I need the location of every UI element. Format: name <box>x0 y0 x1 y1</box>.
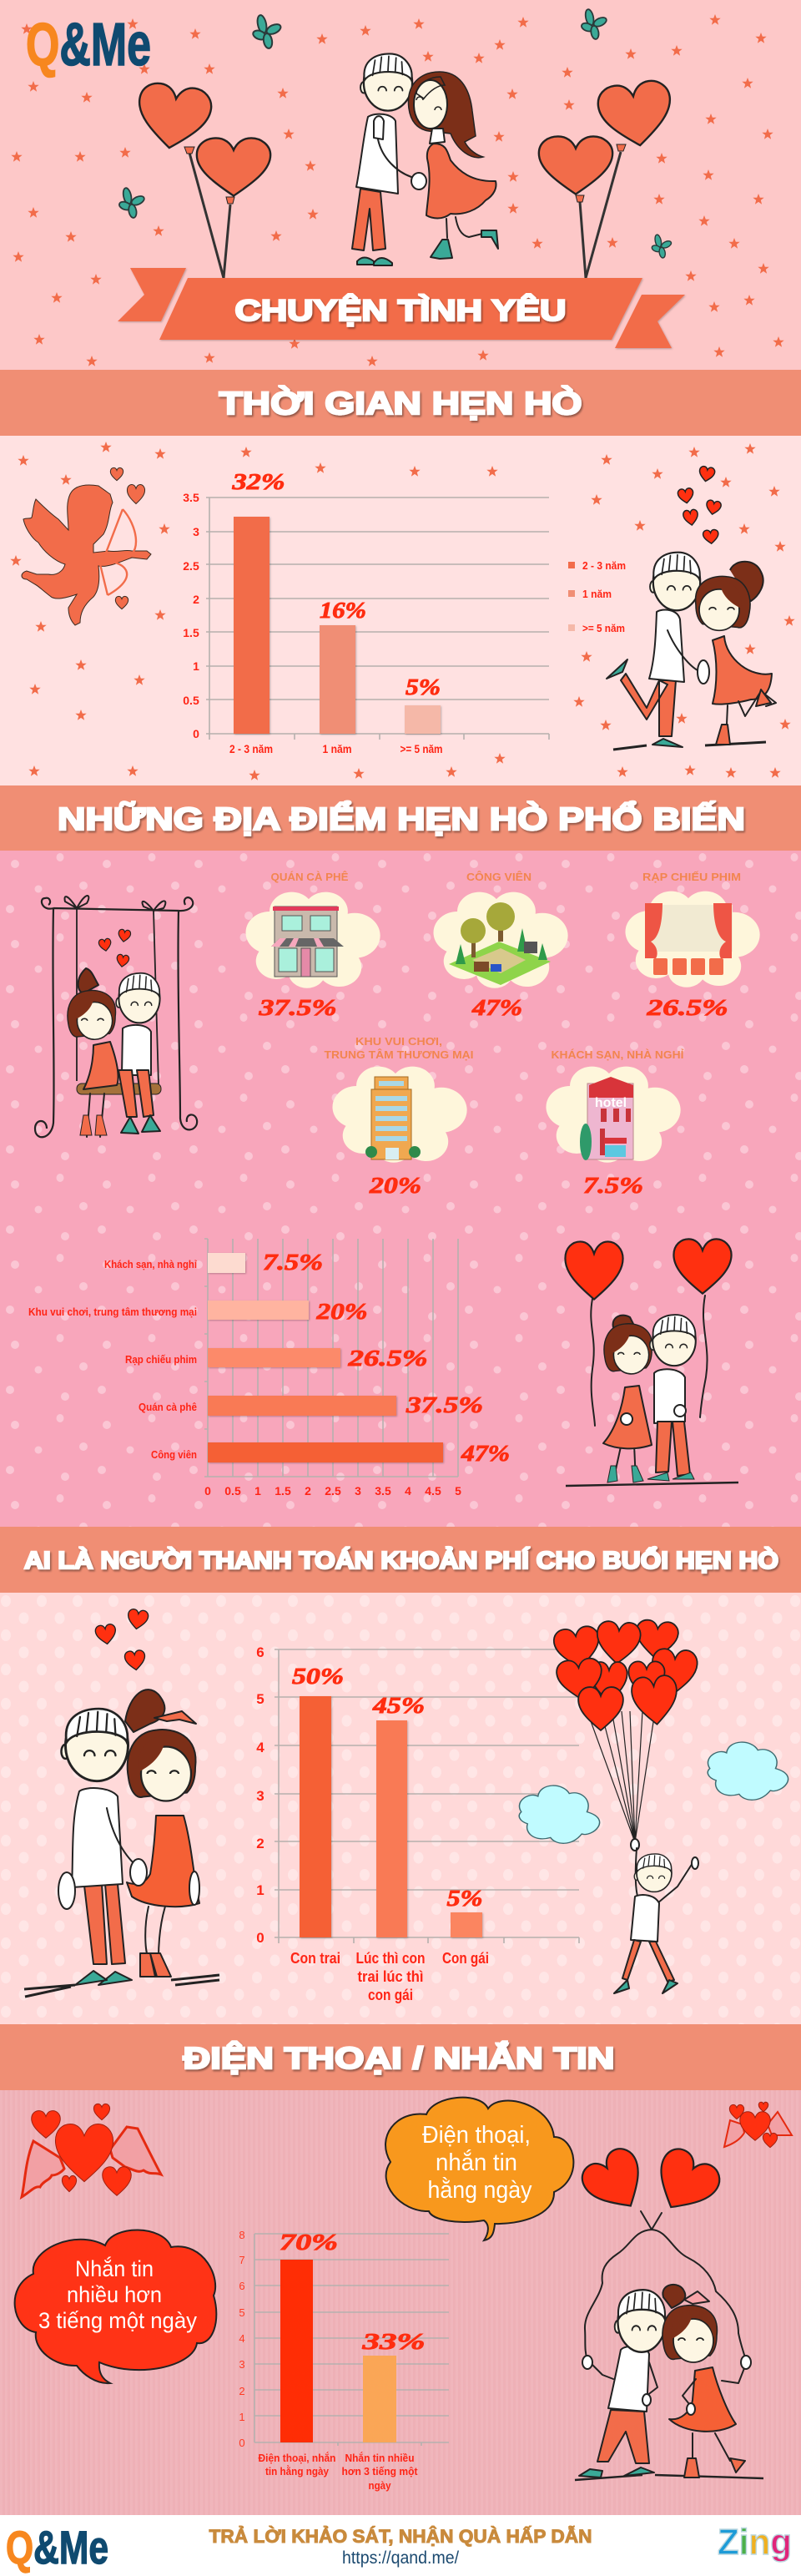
axis values: 2 <box>239 2385 245 2397</box>
illustration: couple with joined balloons <box>575 2143 763 2480</box>
horizontal bar chart: places <box>28 1239 510 1498</box>
icon: coffee shop <box>271 907 344 977</box>
category labels: Công viên <box>151 1448 197 1461</box>
place: công viên: CÔNG VIÊN <box>466 871 531 883</box>
value labels: 5% <box>447 1886 482 1911</box>
ribbon banner: Chuyện tình yêu <box>118 268 685 348</box>
axis values: 4 <box>239 2332 245 2345</box>
callout: Điện thoại, nhắn tin hằng ngày: nhắn tin <box>436 2149 517 2176</box>
icon: butterflies <box>118 8 673 259</box>
category labels: Điện thoại, nhắn <box>259 2452 336 2464</box>
panel: who pays <box>0 1593 801 2024</box>
section header: Ai là người thanh toán: AI LÀ NGƯỜI THANH TOÁN KHOẢN PHÍ CHO BUỔI HẸN HÒ <box>24 1546 778 1574</box>
axis values: 7 <box>239 2254 245 2266</box>
axis values: 4 <box>256 1740 264 1755</box>
place: quán cà phê <box>245 871 380 1020</box>
bar chart: phone and texting <box>239 2229 449 2492</box>
axis values: 1.5 <box>275 1484 291 1498</box>
panel: phone and texting <box>0 2090 801 2515</box>
value labels <box>280 2230 426 2354</box>
axis values: 3 <box>355 1484 361 1498</box>
section header: Thời gian hẹn hò: THỜI GIAN HẸN HÒ <box>219 385 582 422</box>
axis values: 6 <box>239 2280 245 2292</box>
illustration: couple holding hands <box>352 53 498 265</box>
call to action: TRẢ LỜI KHẢO SÁT, NHẬN QUÀ HẤP DẪN <box>209 2525 592 2547</box>
logo: Q&Me: Q&Me <box>6 2521 108 2573</box>
axis values: 2 <box>305 1484 311 1498</box>
value labels <box>263 1250 510 1466</box>
axis values <box>183 491 199 740</box>
logo: Q&Me: Q&Me <box>26 12 151 78</box>
axis values: 0 <box>204 1484 211 1498</box>
axis values: 0.5 <box>183 694 199 707</box>
category labels <box>229 742 442 755</box>
axis values: 1 <box>193 659 199 673</box>
icon: winged heart right <box>724 2102 792 2148</box>
value labels: 5% <box>406 674 441 700</box>
category labels: Khách sạn, nhà nghỉ <box>104 1258 197 1270</box>
category labels: Rạp chiếu phim <box>125 1353 197 1366</box>
legend: 2 - 3 năm <box>582 559 626 572</box>
section header: Điện thoại / Nhắn tin: ĐIỆN THOẠI / NHẮN TIN <box>184 2040 614 2075</box>
axis values: 5 <box>239 2306 245 2319</box>
value labels: 16% <box>320 598 366 623</box>
section header: Thời gian hẹn hò <box>0 370 801 436</box>
axis values: 1.5 <box>183 626 199 639</box>
icon: winged heart left <box>22 2104 161 2197</box>
axis values: 2.5 <box>325 1484 341 1498</box>
axis values <box>256 1644 264 1946</box>
axis values: 2 <box>256 1836 264 1851</box>
link: https://qand.me/ <box>342 2548 459 2568</box>
value labels: 33% <box>361 2329 426 2354</box>
value labels: 26.5% <box>347 1346 427 1371</box>
value labels: 47% <box>461 1441 510 1466</box>
decorative stars <box>10 442 795 780</box>
axis values: 4.5 <box>425 1484 441 1498</box>
value labels: 70% <box>280 2230 338 2255</box>
icon: cinema <box>645 903 733 975</box>
axis values: 5 <box>256 1691 264 1707</box>
value labels: 32% <box>231 469 285 494</box>
category labels: Khu vui chơi, trung tâm thương mại <box>28 1306 197 1318</box>
axis values: 3 <box>193 525 199 538</box>
axis values: 3.5 <box>375 1484 391 1498</box>
illustration: couple holding hands <box>24 1609 219 1997</box>
place: rạp chiếu phim <box>625 871 760 1020</box>
value labels: 20% <box>315 1299 367 1324</box>
callout: Nhắn tin nhiều hơn 3 tiếng một ngày <box>15 2230 216 2383</box>
illustration: clouds <box>519 1742 788 1843</box>
category labels: Lúc thì con <box>355 1950 426 1967</box>
value labels: 50% <box>292 1664 344 1689</box>
axis values: 3.5 <box>183 491 199 504</box>
category labels: tin hằng ngày <box>265 2465 330 2478</box>
panel: popular dating places <box>0 851 801 1527</box>
value labels <box>231 469 441 700</box>
illustration: couple with hearts <box>607 466 776 750</box>
axis values: 2 <box>193 593 199 606</box>
axis values: 8 <box>239 2229 245 2241</box>
legend <box>568 559 626 634</box>
axis values: 0 <box>256 1930 264 1946</box>
category labels <box>28 1258 197 1461</box>
value: 37.5% <box>258 995 337 1020</box>
callout: Nhắn tin nhiều hơn 3 tiếng một ngày: 3 tiếng một ngày <box>38 2308 197 2333</box>
legend: 1 năm <box>582 588 612 600</box>
title: CHUYỆN TÌNH YÊU <box>235 294 566 327</box>
footer <box>0 2515 801 2576</box>
logo: Zing: Zing <box>718 2522 792 2563</box>
category labels: >= 5 năm <box>400 742 442 755</box>
section header: Điện thoại / Nhắn tin <box>0 2024 801 2090</box>
category labels: trai lúc thì <box>357 1968 424 1985</box>
illustration: couple on a swing <box>35 896 197 1137</box>
icon: left heart balloons <box>134 81 270 278</box>
category labels <box>290 1950 489 2003</box>
value: 20% <box>369 1173 421 1198</box>
bar chart: dating duration <box>183 469 549 755</box>
value: 7.5% <box>583 1173 643 1198</box>
axis values: 5 <box>455 1484 461 1498</box>
value labels: 37.5% <box>406 1392 483 1417</box>
axis values: 3 <box>239 2358 245 2371</box>
axis values: 6 <box>256 1644 264 1660</box>
illustration: cupid <box>22 467 151 625</box>
place: công viên <box>433 871 568 1020</box>
icon: right heart balloons <box>539 78 676 278</box>
axis values <box>204 1484 461 1498</box>
category labels: Con trai <box>290 1950 340 1967</box>
illustration: boy flying with heart balloons <box>552 1619 698 1993</box>
icon: hotel: hotel <box>595 1096 627 1110</box>
icon: hotel <box>580 1077 633 1160</box>
place: khu vui chơi, trung tâm thương mại: KHU VUI CHƠI, <box>355 1035 442 1048</box>
category labels: Quán cà phê <box>139 1401 197 1413</box>
category labels: con gái <box>368 1987 413 2003</box>
category labels: hơn 3 tiếng một <box>342 2465 418 2478</box>
category labels: 1 năm <box>322 742 352 755</box>
axis values: 3 <box>256 1788 264 1804</box>
axis values: 4 <box>405 1484 411 1498</box>
category labels: Nhắn tin nhiều <box>345 2452 415 2464</box>
category labels: ngày <box>369 2479 391 2492</box>
value labels <box>292 1664 482 1911</box>
axis values: 1 <box>256 1882 264 1898</box>
bar chart: who pays <box>256 1644 579 2003</box>
value: 47% <box>471 995 522 1020</box>
place: khách sạn, nhà nghỉ <box>546 1048 684 1198</box>
section header: Những địa điểm hẹn hò phổ biến: NHỮNG ĐỊA ĐIỂM HẸN HÒ PHỔ BIẾN <box>58 800 745 837</box>
section header: Ai là người thanh toán <box>0 1527 801 1593</box>
axis values: 2.5 <box>183 559 199 573</box>
category labels: Con gái <box>442 1950 489 1967</box>
place: quán cà phê: QUÁN CÀ PHÊ <box>270 871 349 883</box>
axis values: 0 <box>193 727 199 740</box>
place: khu vui chơi, trung tâm thương mại: TRUNG TÂM THƯƠNG MẠI <box>324 1048 474 1061</box>
axis values: 1 <box>254 1484 261 1498</box>
axis values: 1 <box>239 2411 245 2423</box>
callout: Điện thoại, nhắn tin hằng ngày: hằng ngày <box>427 2176 532 2204</box>
callout: Điện thoại, nhắn tin hằng ngày <box>385 2098 573 2240</box>
legend: >= 5 năm <box>582 622 625 634</box>
category labels: 2 - 3 năm <box>229 742 273 755</box>
category labels <box>259 2452 418 2492</box>
callout: Nhắn tin nhiều hơn 3 tiếng một ngày: Nhắn tin <box>75 2255 154 2281</box>
value: 26.5% <box>646 995 728 1020</box>
place: rạp chiếu phim: RẠP CHIẾU PHIM <box>642 871 741 883</box>
section header: Những địa điểm hẹn hò phổ biến <box>0 785 801 851</box>
panel: top hero <box>0 0 801 370</box>
icon: park <box>449 902 551 985</box>
panel: dating duration <box>0 436 801 785</box>
place: khách sạn, nhà nghỉ: KHÁCH SẠN, NHÀ NGHỈ <box>551 1048 684 1061</box>
decorative star field <box>11 14 784 366</box>
value labels: 45% <box>372 1693 425 1718</box>
place: khu vui chơi, trung tâm thương mại <box>324 1035 474 1198</box>
axis values <box>239 2229 245 2449</box>
illustration: couple with balloons <box>565 1239 738 1486</box>
callout: Điện thoại, nhắn tin hằng ngày: Điện thoại, <box>422 2122 531 2149</box>
icon: tower <box>365 1077 421 1159</box>
callout: Nhắn tin nhiều hơn 3 tiếng một ngày: nhiều hơn <box>67 2282 162 2307</box>
axis values: 0 <box>239 2437 245 2449</box>
axis values: 0.5 <box>224 1484 241 1498</box>
value labels: 7.5% <box>263 1250 323 1275</box>
